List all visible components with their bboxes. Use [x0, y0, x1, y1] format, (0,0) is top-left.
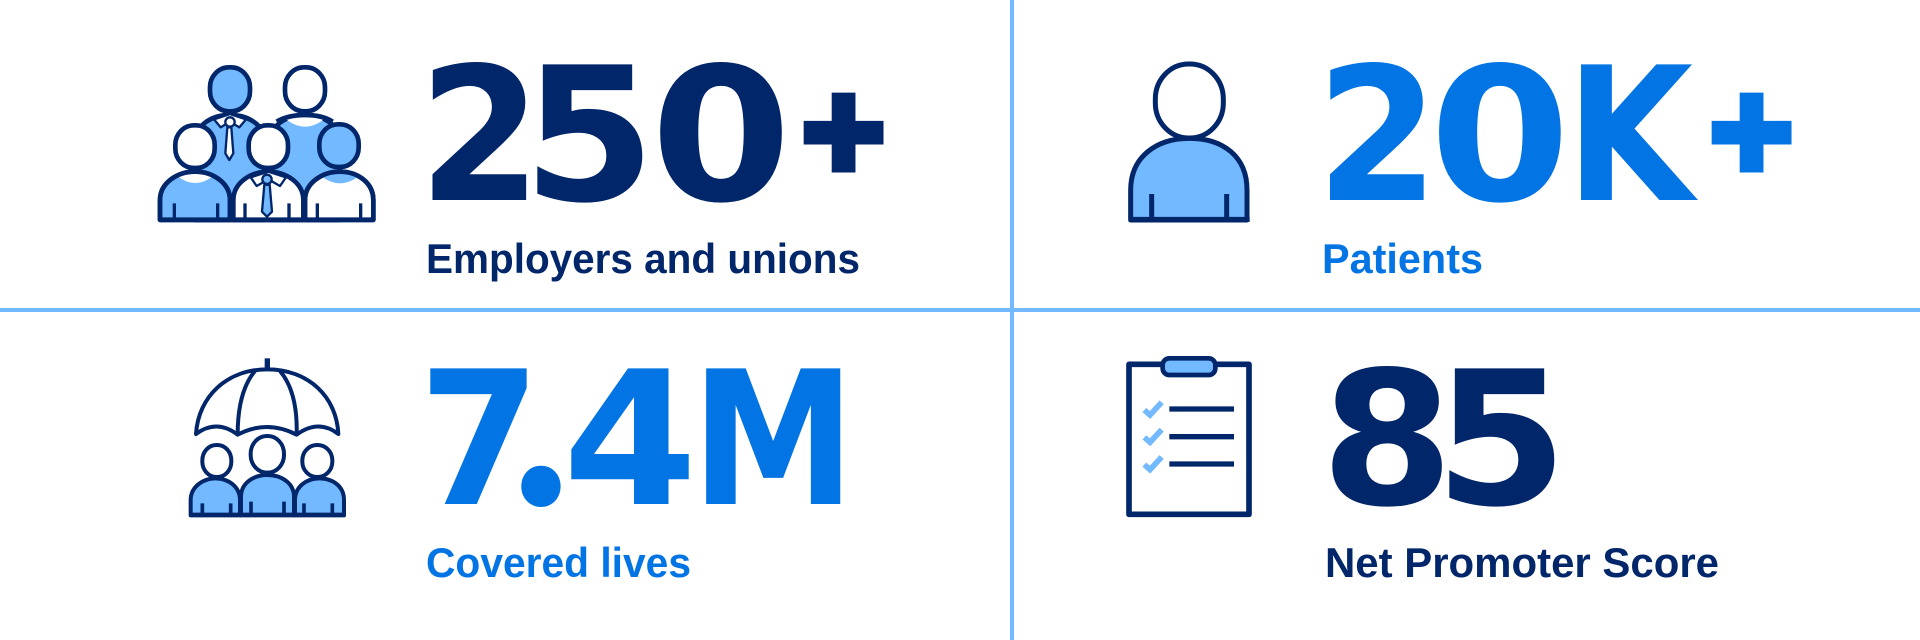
panel: employers and unions [159, 27, 890, 282]
number: 20K+: K [1566, 27, 1698, 244]
number: 250+: 5 [523, 27, 656, 244]
label: Patients: Patients [1322, 235, 1483, 282]
number: 20K+: 0 [1429, 27, 1570, 244]
number: 7.4M: 4 [563, 331, 698, 548]
number: 250+: + [798, 65, 890, 193]
panel: net promoter score [1129, 331, 1719, 586]
number: 85: 5 [1435, 331, 1568, 548]
number: 7.4M: 7 [419, 331, 541, 548]
icon: group of people [159, 67, 374, 220]
number: 7.4M: . [506, 255, 576, 566]
number: 20K+: 2 [1316, 27, 1439, 244]
label: Employers and unions: Employers and unions [426, 235, 860, 282]
label: Covered lives: Covered lives [426, 539, 691, 586]
icon: clipboard checklist [1129, 358, 1249, 514]
label: Net Promoter Score: Net Promoter Score [1325, 539, 1719, 586]
number: 250+: 2 [418, 27, 542, 244]
icon: umbrella over people [189, 358, 345, 515]
number: 7.4M: M [691, 331, 856, 548]
number: 250+: 0 [650, 27, 792, 244]
number: 85: 8 [1321, 331, 1454, 548]
panel: covered lives [189, 255, 856, 586]
number: 20K+: + [1706, 65, 1798, 193]
panel: patients [1129, 27, 1798, 282]
icon: person [1129, 64, 1250, 220]
